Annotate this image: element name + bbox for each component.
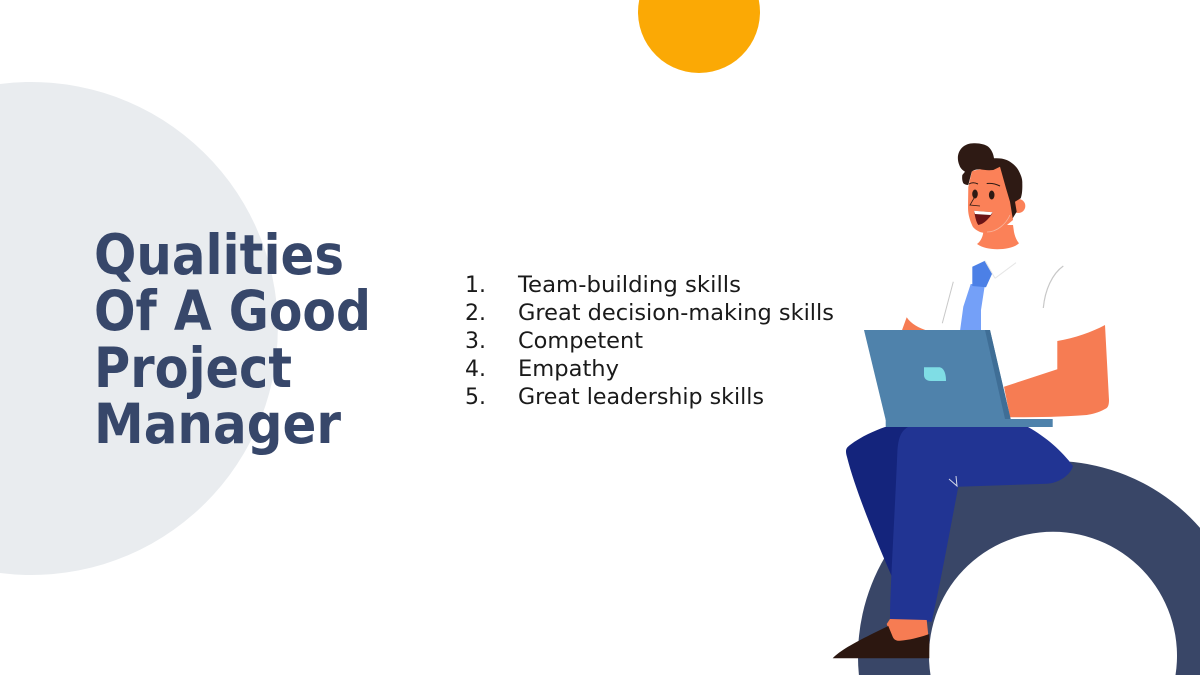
ankle [887,619,929,648]
jaw line [987,215,1010,232]
laptop screen edge [985,330,1011,419]
shoe [833,626,929,658]
title: Project [94,336,292,400]
illustration: project manager with laptop [833,143,1109,658]
ear [1011,199,1025,213]
background circle: grey [0,82,278,575]
front leg [890,427,1073,622]
title: Manager [94,392,341,456]
teeth [974,211,993,215]
numbered list of qualities: Team-building skills [517,273,741,298]
laptop screen [864,330,1011,420]
back leg [846,427,912,577]
numbered list of qualities [465,273,834,410]
tie [960,261,992,331]
hair [958,143,1022,218]
title: Qualities [94,223,344,287]
laptop logo [924,367,946,381]
numbered list of qualities: Empathy [518,357,619,382]
title: Of A Good [94,279,371,343]
knee crease [949,476,957,486]
neck [977,225,1019,249]
numbered list of qualities: Competent [518,329,643,354]
numbered list of qualities: 2. [465,301,486,326]
numbered list of qualities: 3. [465,329,486,354]
shirt creases [942,261,1063,323]
background circle: orange [638,0,760,73]
title [94,223,371,456]
numbered list of qualities: 4. [465,357,486,382]
hand behind laptop [902,317,928,331]
numbered list of qualities: 5. [465,385,486,410]
forearm [1004,325,1109,417]
background ring: navy [858,461,1200,675]
mouth [974,211,993,225]
numbered list of qualities: Great decision-making skills [518,301,834,326]
laptop base [886,419,1053,427]
numbered list of qualities: 1. [465,273,486,298]
face [968,165,1013,233]
eyebrows and eyes [969,183,1000,206]
numbered list of qualities: Great leadership skills [518,385,764,410]
